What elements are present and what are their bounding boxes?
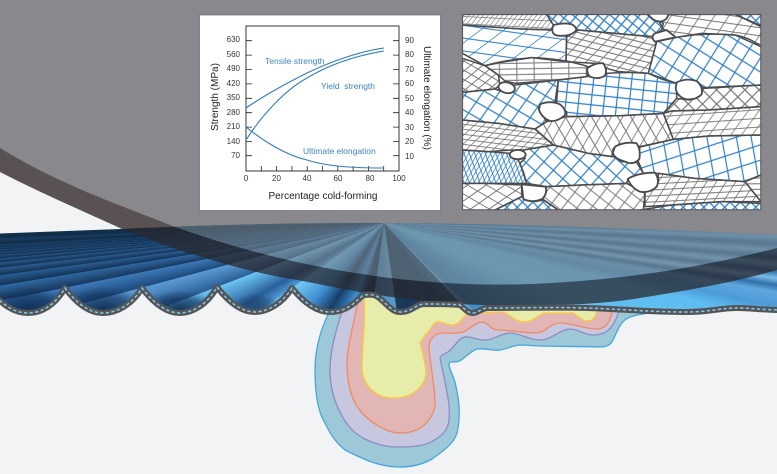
right axis numbers: 30: [405, 123, 414, 132]
panel: strength vs cold-forming chart: [200, 15, 440, 210]
bottom axis numbers: 40: [303, 174, 312, 183]
right axis numbers: 20: [405, 137, 414, 146]
curve labels: Yield strength: [321, 81, 375, 91]
translucent dark band over sheet: [122, 226, 777, 305]
left axis numbers: 630: [227, 35, 241, 44]
right axis numbers: 40: [405, 108, 414, 117]
left axis numbers: 280: [227, 108, 241, 117]
right axis numbers: 50: [405, 94, 414, 103]
yellow core zone: [362, 295, 597, 398]
curve labels: Tensile strength: [265, 56, 325, 66]
curve labels: [265, 56, 376, 156]
grains: [462, 14, 761, 210]
left axis numbers: 140: [227, 137, 241, 146]
curves: [246, 48, 384, 168]
outer blue zone: [315, 295, 660, 467]
corrugated blue sheet fan: [0, 223, 777, 310]
left axis numbers: 420: [227, 79, 241, 88]
right axis title: Ultimate elongation (%): [421, 46, 432, 150]
bottom axis numbers: 80: [366, 174, 375, 183]
sheet shading, transparent overlays and seam line: [0, 14, 777, 316]
bottom axis numbers: 0: [244, 174, 249, 183]
seam line with dashes: [0, 287, 777, 313]
right axis numbers: 10: [405, 152, 414, 161]
purple zone: [330, 295, 620, 447]
left axis title: Strength (MPa): [210, 63, 221, 131]
right axis numbers: 90: [405, 36, 414, 45]
bottom axis numbers: 100: [392, 174, 406, 183]
left axis numbers: 490: [227, 64, 241, 73]
curve labels: Ultimate elongation: [303, 146, 376, 156]
right axis numbers: 60: [405, 79, 414, 88]
dark sheet edge band: [0, 0, 777, 305]
white inclusions: [497, 13, 702, 201]
left axis numbers: 70: [231, 151, 241, 160]
right axis numbers: [405, 36, 414, 161]
left axis numbers: 560: [227, 50, 241, 59]
orange zone: [347, 295, 612, 433]
right axis numbers: 70: [405, 65, 414, 74]
axis ticks: [246, 41, 399, 171]
x axis title: Percentage cold-forming: [269, 191, 377, 202]
bottom axis numbers: [244, 174, 406, 183]
grey sheet: [0, 0, 777, 285]
bottom axis numbers: 20: [272, 174, 281, 183]
plot frame: [246, 26, 399, 171]
translucent grey lens over sheet: [174, 223, 777, 284]
left axis numbers: [227, 35, 241, 160]
scallop shadows: [4, 288, 277, 310]
bottom axis numbers: 60: [334, 174, 343, 183]
weld heat-affected zones: [315, 295, 660, 467]
right axis numbers: 80: [405, 50, 414, 59]
left axis numbers: 210: [227, 122, 241, 131]
panel: grain micrograph: [462, 13, 761, 210]
left axis numbers: 350: [227, 93, 241, 102]
